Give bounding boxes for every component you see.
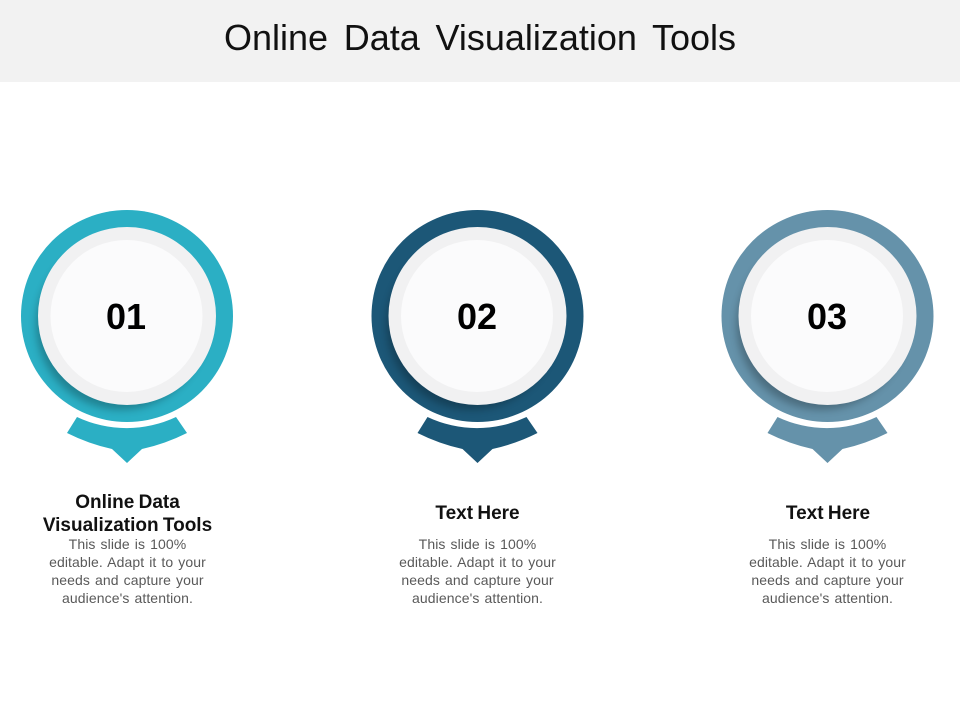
column 3 text: This slide is 100% — [769, 536, 886, 552]
column 1 heading: Visualization Tools — [43, 515, 212, 536]
number 03: 03 — [807, 296, 847, 337]
column 2 text: This slide is 100% — [419, 536, 536, 552]
column 1 heading — [43, 492, 212, 536]
column 1 text — [49, 536, 206, 606]
number 02: 02 — [457, 296, 497, 337]
column 1 text: This slide is 100% — [69, 536, 186, 552]
column 1 text: editable. Adapt it to your — [49, 554, 206, 570]
number 01: 01 — [106, 296, 146, 337]
title: Online Data Visualization Tools — [224, 17, 736, 58]
column 2 text: editable. Adapt it to your — [399, 554, 556, 570]
header band — [0, 0, 960, 82]
circle 03 — [722, 210, 934, 463]
circle 02 — [372, 210, 584, 463]
column 3 text: audience's attention. — [762, 590, 893, 606]
column 2 text — [399, 536, 556, 606]
ribbon 02 — [418, 417, 538, 463]
column 3 heading: Text Here — [786, 503, 870, 524]
column 1 heading: Online Data — [75, 492, 180, 513]
column 2 text: needs and capture your — [401, 572, 554, 588]
column 1 text: audience's attention. — [62, 590, 193, 606]
column 3 text: editable. Adapt it to your — [749, 554, 906, 570]
column 2 text: audience's attention. — [412, 590, 543, 606]
column 1 text: needs and capture your — [51, 572, 204, 588]
column 3 text — [749, 536, 906, 606]
circle graphics — [21, 210, 934, 463]
column 3 text: needs and capture your — [751, 572, 904, 588]
column 2 heading: Text Here — [435, 503, 520, 524]
circle 01 — [21, 210, 233, 463]
ribbon 03 — [768, 417, 888, 463]
ribbon 01 — [67, 417, 187, 463]
